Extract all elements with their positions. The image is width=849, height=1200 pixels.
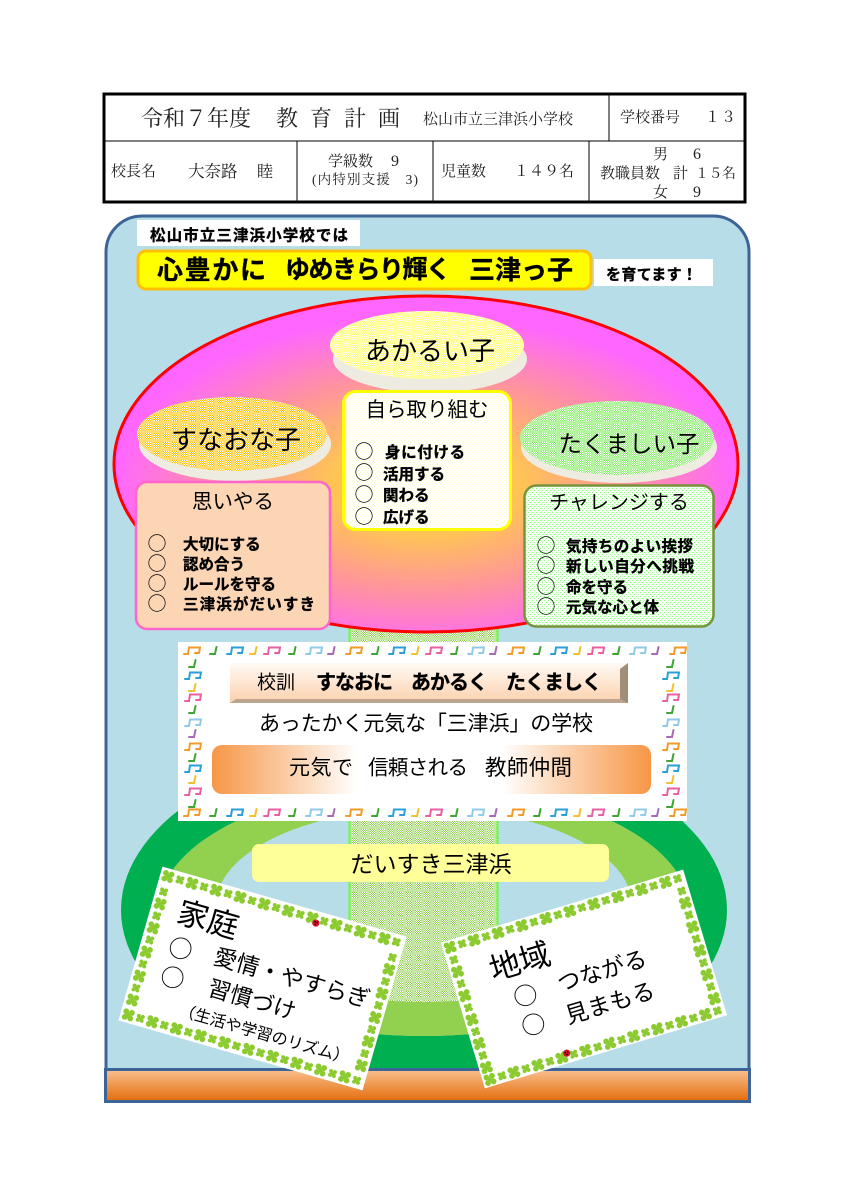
school motto banner: 心豊かに (157, 255, 266, 285)
box: チャレンジする: ○ (536, 531, 556, 558)
ellipse: すなおな子 (137, 397, 331, 481)
teacher bar: 信頼される (368, 756, 468, 780)
ellipse: たくましい子: たくましい子 (558, 431, 700, 457)
class count: 学級数 (328, 153, 373, 170)
school number label: 学校番号 (620, 109, 680, 126)
large red ellipse (114, 296, 738, 632)
box: 自ら取り組む: ○ (354, 502, 374, 529)
box: 自ら取り組む (344, 392, 510, 530)
card: 地域: つながる (554, 945, 650, 997)
teacher bar (212, 745, 651, 794)
school number: １３ (705, 110, 737, 126)
ellipse: たくましい子 (520, 401, 717, 483)
box: 思いやる: ○ (147, 589, 167, 616)
intro label (137, 220, 360, 246)
box: チャレンジする: ○ (536, 592, 556, 619)
ellipse: すなおな子: すなおな子 (171, 425, 301, 455)
staff total: １５名 (695, 166, 736, 182)
principal: 校長名 (111, 163, 156, 180)
plan title spaced: 教育計画 (276, 106, 412, 131)
card: 家庭: 家庭 (173, 895, 243, 945)
box: 思いやる: ○ (147, 569, 167, 596)
box: 自ら取り組む: 関わる (383, 486, 430, 504)
box: チャレンジする: 元気な心と体 (566, 598, 660, 616)
music note border (184, 647, 686, 816)
box: チャレンジする: チャレンジする (549, 492, 689, 514)
box: チャレンジする (524, 486, 714, 626)
box: 自ら取り組む: ○ (354, 458, 374, 485)
card: 地域: 地域 (485, 936, 555, 988)
box: 自ら取り組む: ○ (354, 480, 374, 507)
box: 自ら取り組む: 自ら取り組む (366, 398, 488, 422)
notes frame panel (178, 642, 687, 821)
box: 自ら取り組む: 活用する (383, 466, 445, 484)
base band (106, 1070, 750, 1102)
male staff: 男 (653, 146, 668, 163)
school name: 松山市立三津浜小学校 (423, 111, 574, 128)
principal name: 大奈路 (188, 162, 238, 181)
ellipse: あかるい子 (330, 311, 527, 393)
teacher bar: 元気で (289, 756, 353, 780)
staff label: 教職員数 (600, 165, 660, 182)
plan title: 令和７年度 (141, 106, 251, 131)
female staff: 女 (653, 184, 668, 201)
box: 思いやる (136, 482, 330, 629)
motto button: 校訓 (230, 663, 628, 703)
box: チャレンジする: ○ (536, 572, 556, 599)
label: だいすき三津浜: だいすき三津浜 (350, 851, 512, 877)
green ring (121, 740, 727, 1080)
box: チャレンジする: 気持ちのよい挨拶 (566, 536, 693, 556)
card: 家庭: 愛情・やすらぎ (211, 943, 373, 1013)
box: 思いやる: 思いやる (192, 490, 274, 514)
special support count: (内特別支援 3) (312, 171, 418, 187)
card: 家庭: ○ (157, 956, 189, 996)
card: 地域 (441, 870, 727, 1088)
motto suffix (594, 259, 713, 286)
card: 家庭: （生活や学習のリズム） (177, 1002, 351, 1067)
male staff number: 6 (693, 146, 701, 163)
box: チャレンジする: 新しい自分へ挑戦 (566, 556, 694, 576)
label: だいすき三津浜 (252, 844, 609, 882)
motto button: 校訓: すなおに あかるく たくましく (316, 671, 602, 694)
class count number: 9 (391, 153, 399, 170)
box: 自ら取り組む: 身に付ける (385, 444, 465, 462)
card: 家庭 (118, 867, 407, 1090)
motto button: 校訓: 校訓 (257, 672, 295, 694)
teacher bar: 教師仲間 (485, 756, 572, 780)
box: 思いやる: ○ (147, 529, 167, 556)
box: チャレンジする: ○ (536, 551, 556, 578)
box: 思いやる: 三津浜がだいすき (183, 594, 315, 614)
school vision: あったかく元気な「三津浜」の学校 (259, 712, 593, 736)
female staff number: 9 (693, 184, 701, 201)
box: チャレンジする: 命を守る (566, 578, 628, 596)
card: 家庭: 習慣づけ (205, 976, 299, 1024)
card: 地域: ○ (516, 1003, 550, 1043)
box: 思いやる: ルールを守る (183, 576, 276, 594)
box: 思いやる: 認め合う (183, 556, 245, 574)
box: 自ら取り組む: 広げる (383, 508, 430, 526)
motto suffix: を育てます！ (606, 266, 697, 284)
school motto banner (138, 251, 591, 289)
ellipse: あかるい子: あかるい子 (365, 336, 495, 366)
pupils label: 児童数 (441, 162, 486, 180)
pupils count: １４９名 (514, 163, 574, 180)
intro label: 松山市立三津浜小学校では (150, 226, 348, 244)
stalk column (350, 628, 498, 1038)
box: 思いやる: ○ (147, 549, 167, 576)
school motto banner: 三津っ子 (469, 255, 573, 285)
staff total label: 計 (673, 165, 688, 182)
main panel (106, 216, 749, 1072)
header table (104, 94, 745, 202)
principal given name: 睦 (257, 163, 273, 181)
school motto banner: ゆめきらり輝く (285, 256, 451, 284)
card: 地域: 見まもる (562, 977, 658, 1029)
box: 自ら取り組む: ○ (354, 437, 374, 464)
card: 地域: ○ (508, 974, 542, 1014)
box: 思いやる: 大切にする (183, 536, 261, 554)
card: 家庭: ○ (165, 927, 197, 967)
